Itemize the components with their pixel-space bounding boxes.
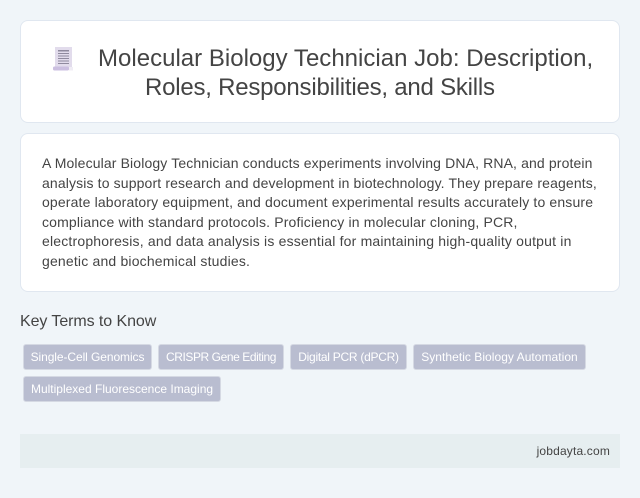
tag: CRISPR Gene Editing xyxy=(166,350,276,364)
text: description: analysis to support research and development in biotechnology. They prepare reagents, xyxy=(42,175,597,191)
heading: title: Roles, Responsibilities, and Skills xyxy=(145,74,495,101)
tag xyxy=(23,344,152,370)
heading: key terms: Key Terms to Know xyxy=(20,313,156,330)
text: description: genetic and biochemical studies. xyxy=(42,253,250,269)
tag xyxy=(23,376,221,402)
text: description: compliance with standard protocols. Proficiency in molecular cloning, PCR, xyxy=(42,214,518,230)
footer bar xyxy=(20,434,620,468)
icon: document scroll xyxy=(53,47,73,70)
heading: title xyxy=(98,45,593,101)
panel: description card xyxy=(20,133,620,292)
text: description xyxy=(42,155,597,269)
heading: title: Molecular Biology Technician Job: Description, xyxy=(98,45,593,72)
panel: title card xyxy=(20,20,620,123)
tag list xyxy=(23,344,586,402)
text: description: electrophoresis, and data analysis is essential for maintaining high-quality output in xyxy=(42,233,572,249)
tag: Digital PCR (dPCR) xyxy=(298,350,399,364)
tag: Single-Cell Genomics xyxy=(31,350,144,364)
footer text: jobdayta.com xyxy=(537,444,610,458)
tag xyxy=(290,344,407,370)
tag xyxy=(413,344,586,370)
tag: Synthetic Biology Automation xyxy=(421,350,578,364)
text: description: A Molecular Biology Technician conducts experiments involving DNA, RNA, and protein xyxy=(42,155,593,171)
tag: Multiplexed Fluorescence Imaging xyxy=(31,382,213,396)
tag xyxy=(158,344,284,370)
text: description: operate laboratory equipment, and document experimental results accurately to ensure xyxy=(42,194,593,210)
